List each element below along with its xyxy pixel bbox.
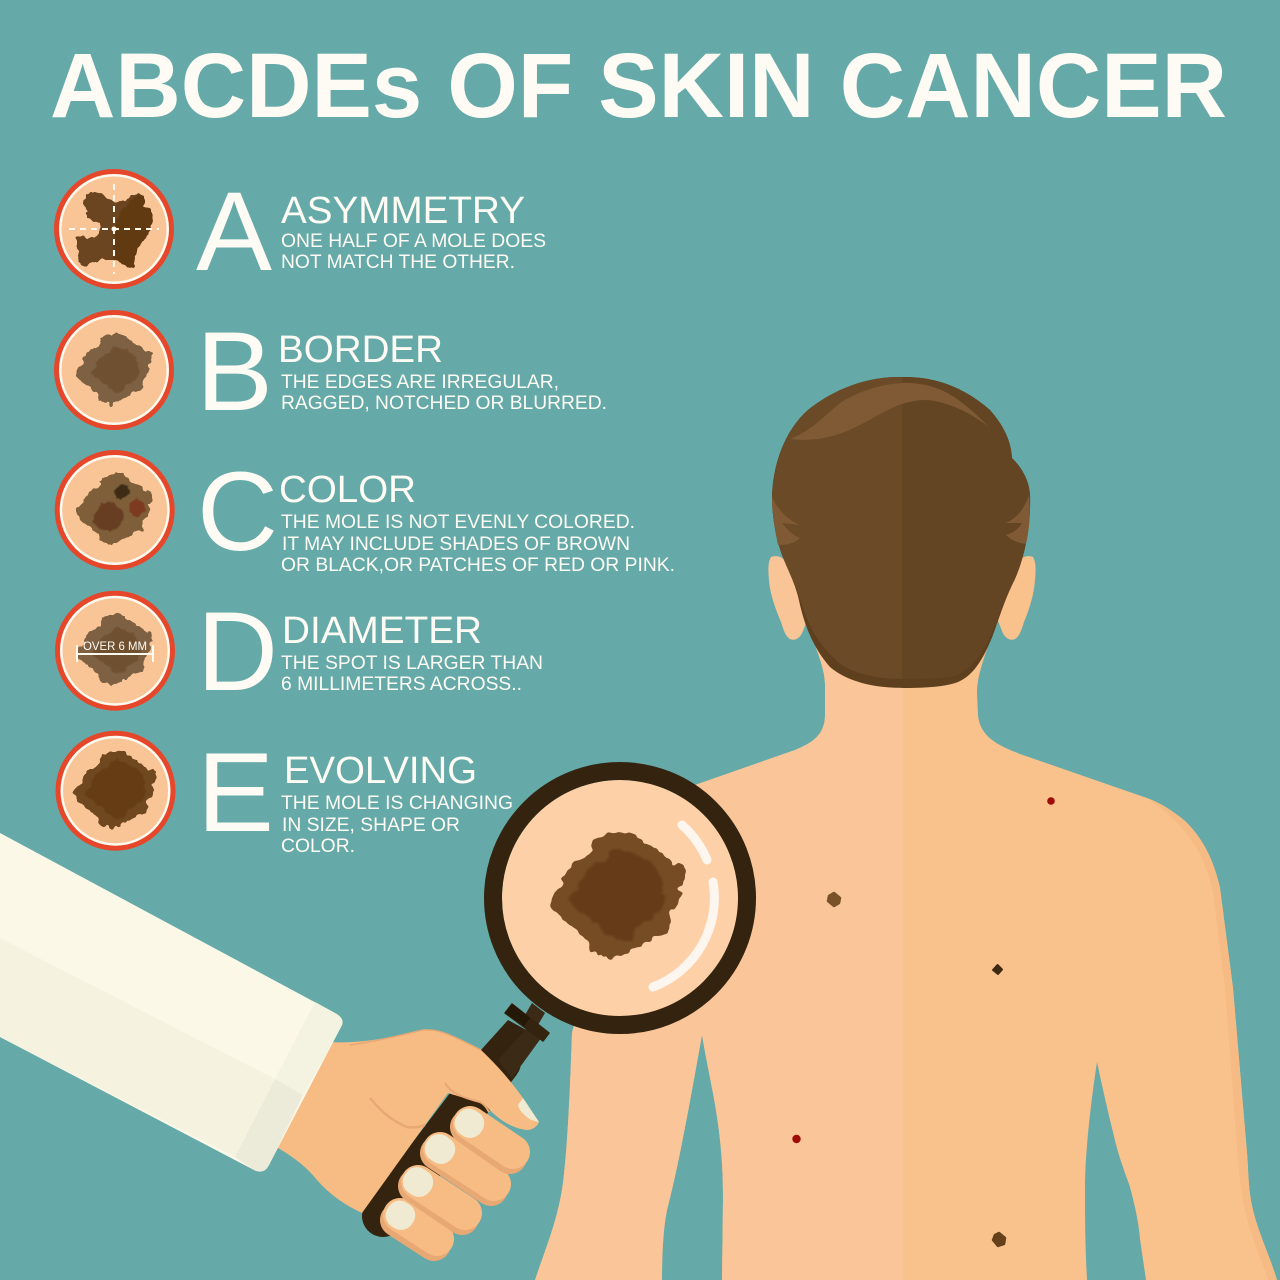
- title: ABCDEs OF SKIN CANCER: [50, 35, 1227, 137]
- heading: asymmetry: ASYMMETRY: [281, 190, 525, 232]
- heading: evolving: EVOLVING: [284, 750, 477, 792]
- row A: asymmetry: [54, 169, 546, 294]
- description: color: IT MAY INCLUDE SHADES OF BROWN: [282, 533, 630, 555]
- description: evolving: [281, 792, 513, 857]
- heading: border: BORDER: [278, 329, 443, 371]
- row C: color: [55, 449, 675, 576]
- icon: evolving mole: [56, 731, 176, 851]
- description: evolving: COLOR.: [281, 835, 355, 857]
- letter C: C: [197, 449, 278, 574]
- hair: [772, 377, 1030, 688]
- finger 3: [398, 1162, 465, 1218]
- ears: [768, 556, 1036, 640]
- finger 2: [420, 1129, 494, 1189]
- magnifying glass: [383, 771, 747, 1216]
- description: color: OR BLACK,OR PATCHES OF RED OR PINK.: [281, 554, 675, 576]
- letter B: B: [196, 309, 273, 434]
- description: asymmetry: NOT MATCH THE OTHER.: [281, 251, 515, 273]
- row E: evolving: [56, 730, 513, 857]
- coat sleeve: [0, 833, 343, 1172]
- lens ring: [493, 771, 747, 1025]
- patient figure: [535, 377, 1277, 1280]
- icon: asymmetric mole: [54, 169, 174, 289]
- icon: mole with 6 mm measure: [55, 591, 175, 711]
- letter A: A: [196, 169, 272, 294]
- torso: [535, 615, 1277, 1280]
- row D: diameter: [55, 589, 543, 714]
- description: border: RAGGED, NOTCHED OR BLURRED.: [281, 392, 607, 414]
- description: diameter: [281, 652, 543, 695]
- description: evolving: IN SIZE, SHAPE OR: [282, 814, 460, 836]
- description: diameter: THE SPOT IS LARGER THAN: [281, 652, 543, 674]
- finger 1: [450, 1104, 513, 1157]
- description: color: THE MOLE IS NOT EVENLY COLORED.: [281, 511, 635, 533]
- icon: multicolored mole: [55, 450, 175, 570]
- description: border: [281, 371, 607, 414]
- icon: irregular border mole: [54, 310, 174, 430]
- row B: border: [54, 309, 607, 434]
- letter D: D: [197, 589, 278, 714]
- description: border: THE EDGES ARE IRREGULAR,: [281, 371, 559, 393]
- hand: [270, 1030, 539, 1244]
- skin spots: [792, 797, 1055, 1246]
- handle: [383, 1003, 549, 1216]
- heading: diameter: DIAMETER: [282, 610, 482, 652]
- letter E: E: [197, 730, 274, 855]
- finger 4: [381, 1196, 437, 1244]
- lens with enlarged mole: [502, 780, 738, 1016]
- description: diameter: 6 MILLIMETERS ACROSS..: [281, 673, 522, 695]
- description: color: [281, 511, 675, 576]
- description: evolving: THE MOLE IS CHANGING: [281, 792, 513, 814]
- heading: color: COLOR: [279, 469, 416, 511]
- description: asymmetry: ONE HALF OF A MOLE DOES: [281, 230, 546, 252]
- description: asymmetry: [281, 230, 546, 273]
- icon: mole with 6 mm measure: OVER 6 MM: [83, 641, 147, 653]
- doctor's hand with magnifying glass: [0, 771, 747, 1244]
